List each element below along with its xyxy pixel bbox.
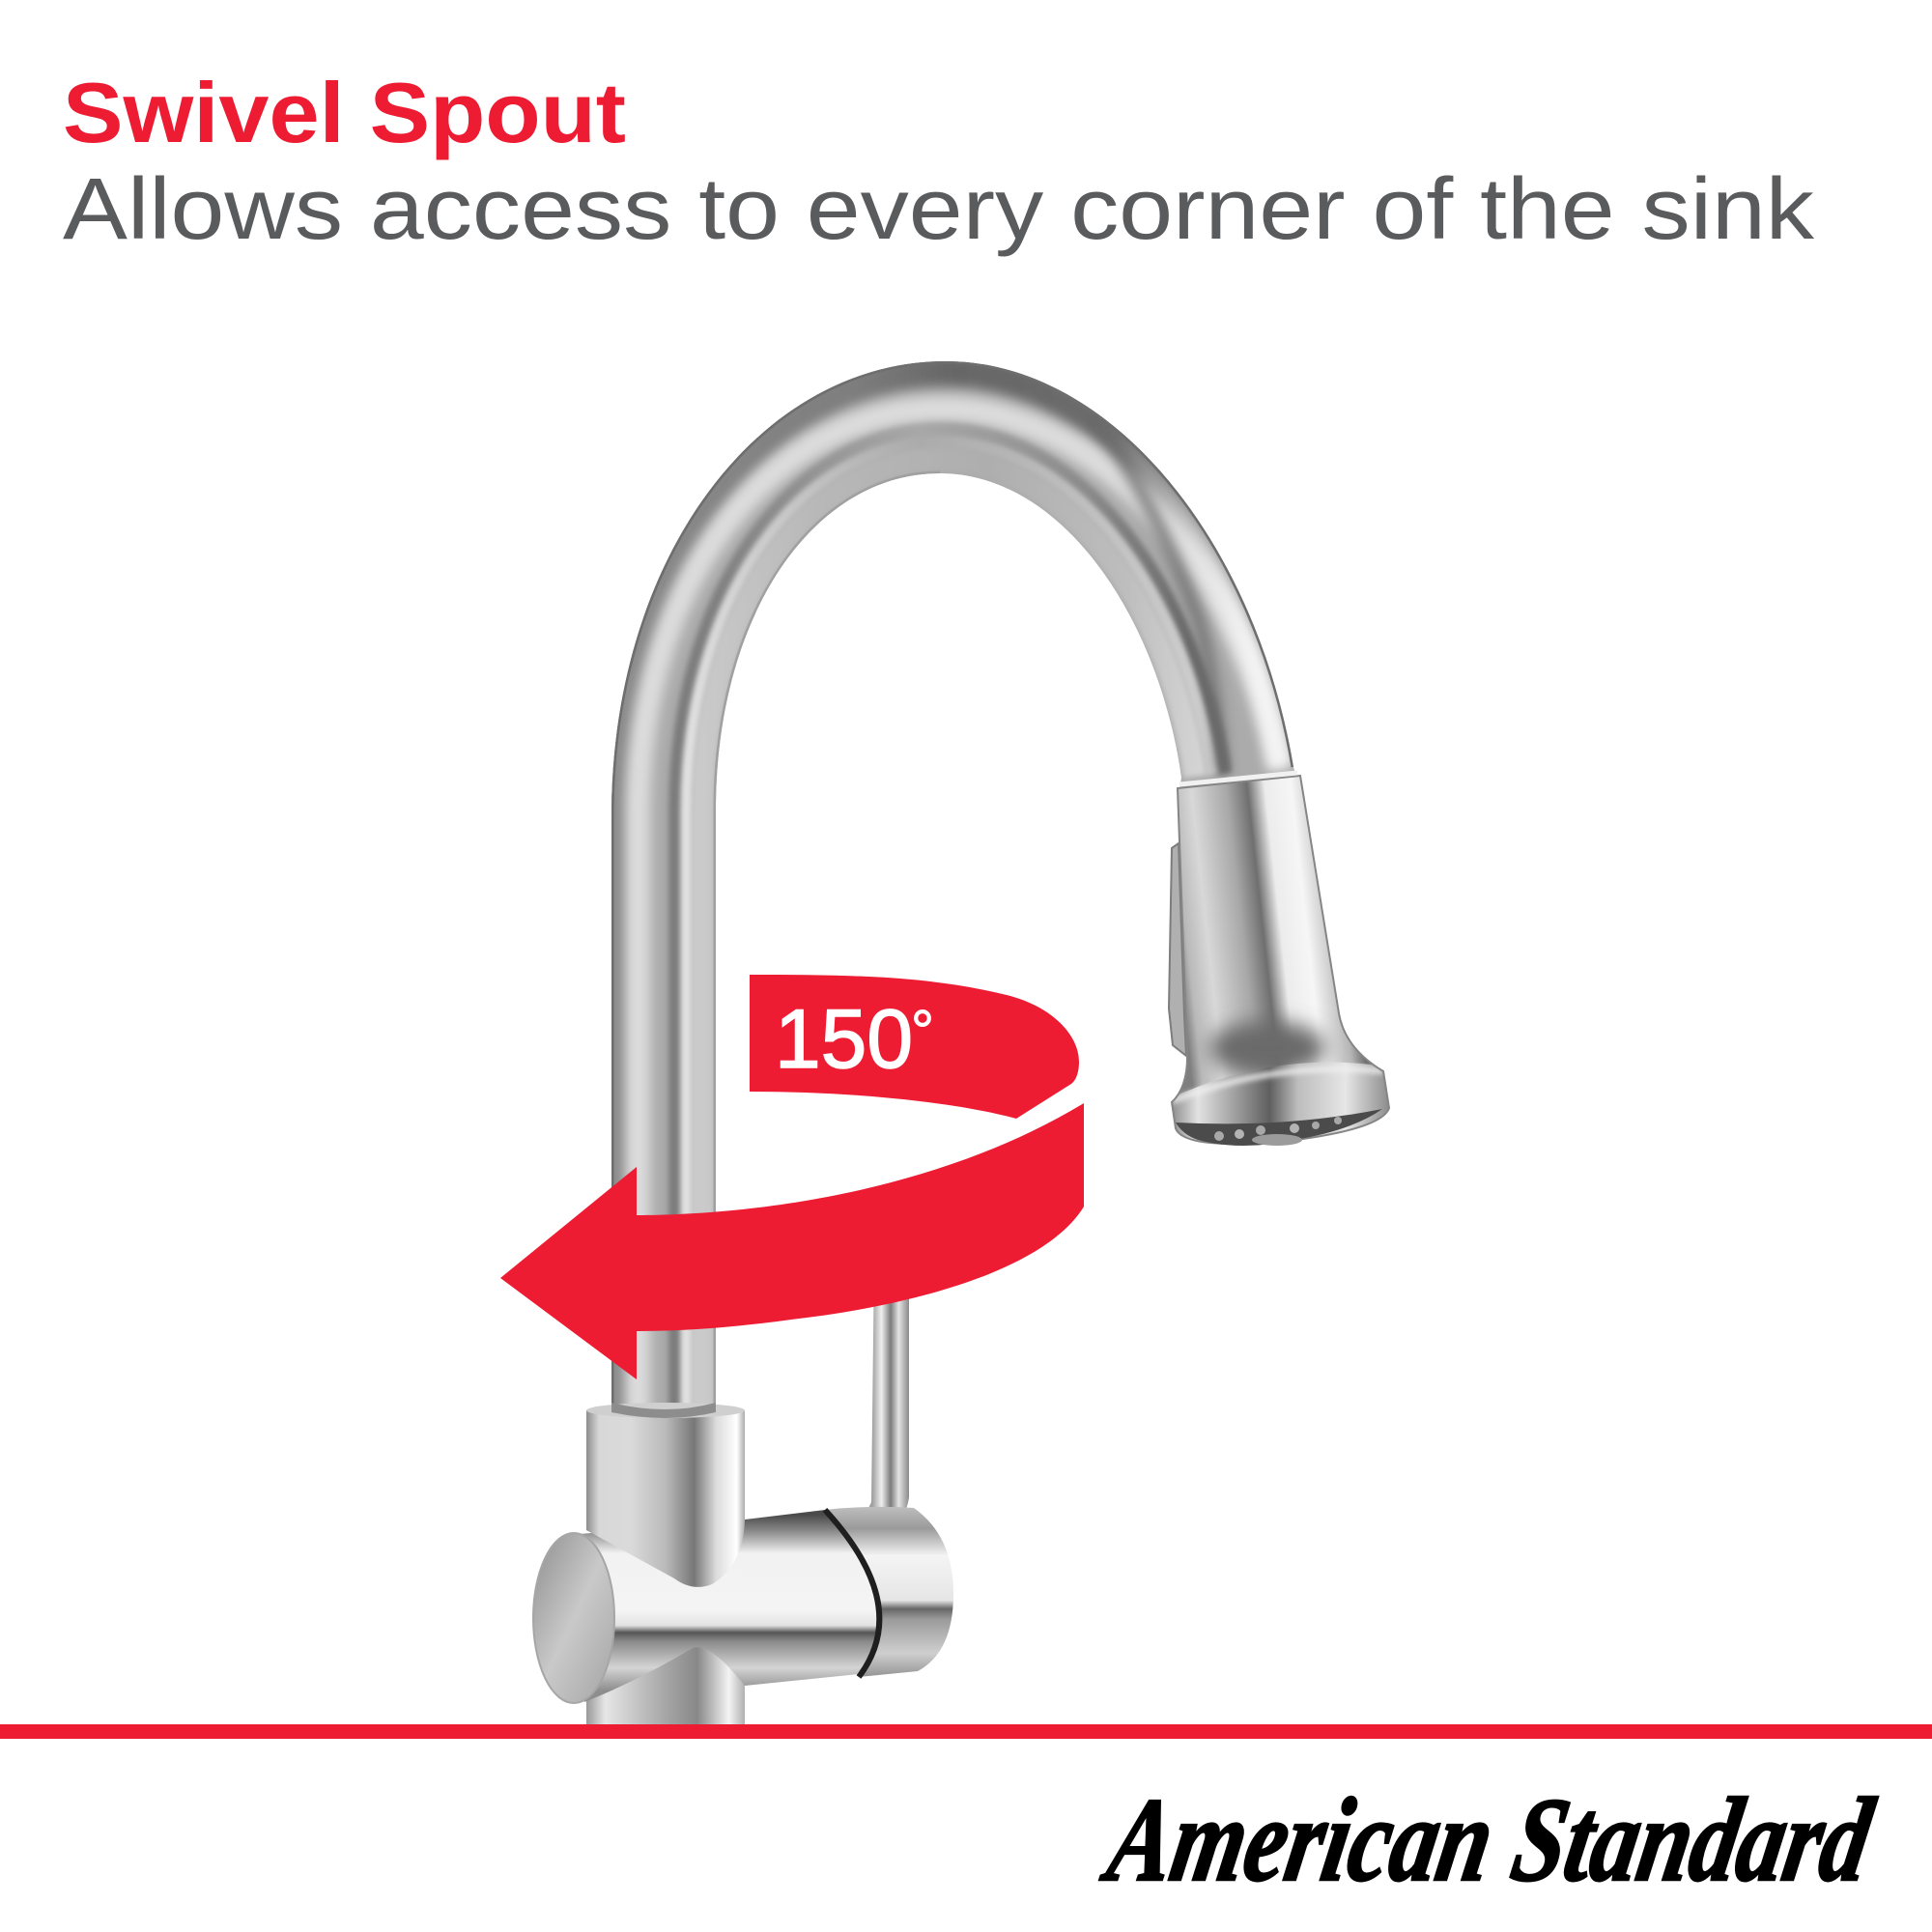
spout collar ring <box>1179 773 1297 784</box>
rotation label: 150 <box>775 993 913 1086</box>
faucet mixer end <box>825 1507 953 1677</box>
red divider line <box>0 1724 1932 1739</box>
faucet arched spout tube <box>599 348 1314 1430</box>
faucet illustration <box>533 348 1396 1725</box>
red rotation arrow <box>500 975 1084 1379</box>
faucet spray head <box>1164 768 1396 1154</box>
title: Swivel Spout: Swivel Spout <box>63 65 626 160</box>
faucet rod <box>855 1256 909 1536</box>
faucet spray head trigger <box>1169 843 1186 1056</box>
faucet mixer body <box>580 1510 879 1702</box>
faucet divider ring <box>825 1510 879 1677</box>
arrow upper band <box>750 975 1079 1119</box>
faucet lower pipe <box>586 1633 745 1725</box>
rotation label: ° <box>911 999 934 1064</box>
spray nozzle face <box>1176 1109 1382 1146</box>
arrow lower band and head <box>500 1103 1084 1379</box>
faucet handle cap <box>533 1533 614 1703</box>
subtitle: Allows access to every corner of the sink <box>63 161 1815 258</box>
faucet collar <box>586 1403 745 1587</box>
